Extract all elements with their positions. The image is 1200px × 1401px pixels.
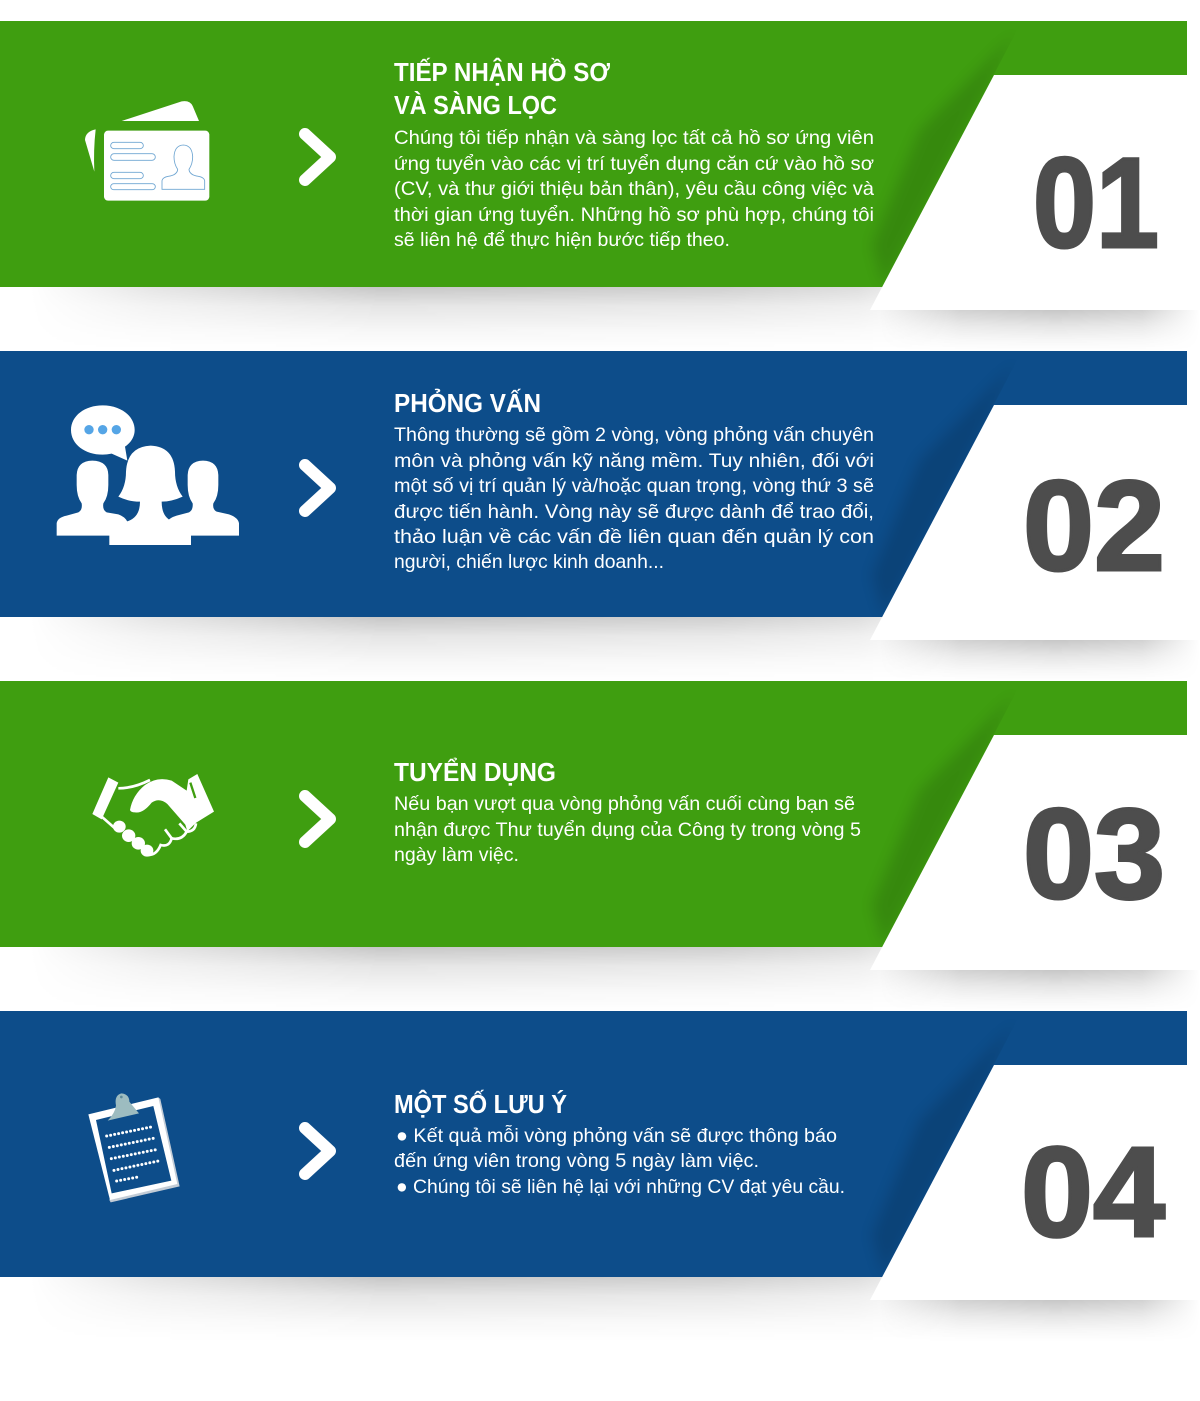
panel: step 3 [0,681,1200,1011]
text block: một số vị trí quản lý và/hoặc quan trọng, vòng thứ 3 sẽ [394,475,874,497]
text block [394,793,861,866]
heading: TUYỂN DỤNG [394,758,556,787]
text block: ● Chúng tôi sẽ liên hệ lại với những CV đạt yêu cầu. [396,1176,845,1198]
text block [394,127,874,251]
heading: PHỎNG VẤN [394,388,541,418]
icon: chevron arrow [305,465,330,511]
text block: Chúng tôi tiếp nhận và sàng lọc tất cả hồ sơ ứng viên [394,127,874,149]
heading [394,57,610,120]
text block: ● Kết quả mỗi vòng phỏng vấn sẽ được thông báo [396,1124,837,1147]
text block: thời gian ứng tuyển. Những hồ sơ phù hợp, chúng tôi [394,204,874,226]
heading: MỘT SỐ LƯU Ý [394,1089,567,1119]
number 03: 03 [1023,783,1165,926]
text block: được tiến hành. Vòng này sẽ được dành để trao đổi, [394,501,874,523]
icon: ID cards [85,101,209,201]
text block: người, chiến lược kinh doanh... [394,551,664,573]
text block: môn và phỏng vấn kỹ năng mềm. Tuy nhiên, đối với [394,450,874,472]
icon: chevron arrow [305,134,330,180]
text block: đến ứng viên trong vòng 5 ngày làm việc. [394,1150,759,1172]
panel: step 2 [0,351,1200,681]
text block: nhận được Thư tuyển dụng của Công ty trong vòng 5 [394,819,861,841]
heading: VÀ SÀNG LỌC [394,91,557,120]
icon: chevron arrow [305,1128,330,1174]
panel: step 1 [0,21,1200,351]
text block: Thông thường sẽ gồm 2 vòng, vòng phỏng vấn chuyên [394,424,874,446]
text block: thảo luận về các vấn đề liên quan đến quản lý con [394,526,874,548]
icon: clipboard [88,1093,180,1202]
icon: interview people [57,405,239,545]
text block: sẽ liên hệ để thực hiện bước tiếp theo. [394,229,730,251]
text block: (CV, và thư giới thiệu bản thân), yêu cầu công việc và [394,178,874,200]
text block: Nếu bạn vượt qua vòng phỏng vấn cuối cùng bạn sẽ [394,793,855,815]
icon: handshake [92,774,214,857]
number 01: 01 [1033,132,1159,275]
text block: ứng tuyển vào các vị trí tuyển dụng căn cứ vào hồ sơ [394,153,874,175]
heading: TIẾP NHẬN HỒ SƠ [394,57,610,87]
icon: chevron arrow [305,796,330,842]
text block [394,424,874,573]
text block [394,1124,845,1198]
panel: step 4 [0,1011,1200,1341]
number 02: 02 [1023,455,1165,598]
number 04: 04 [1021,1121,1165,1264]
text block: ngày làm việc. [394,844,519,866]
